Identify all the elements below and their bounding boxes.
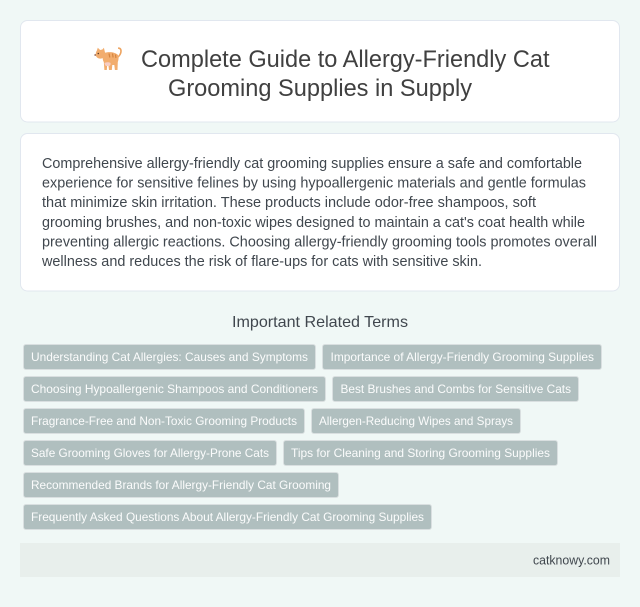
text block: description: wellness and reduces the risk of flare-ups for cats with sensitive skin. bbox=[41, 254, 482, 270]
text block: description: Comprehensive allergy-friendly cat grooming supplies ensure a safe and comfortable bbox=[42, 156, 582, 172]
chip: shampoos bbox=[24, 376, 326, 402]
text block: description: that minimize skin irritation. These products include odor-free shampoos, soft bbox=[42, 195, 536, 211]
text block: description bbox=[41, 156, 597, 270]
chip: importance bbox=[322, 344, 602, 370]
chip: wipes bbox=[312, 408, 520, 434]
chip: shampoos: Choosing Hypoallergenic Shampoos and Conditioners bbox=[31, 382, 318, 396]
title bbox=[141, 46, 550, 102]
chip: fragrance-free: Fragrance-Free and Non-Toxic Grooming Products bbox=[31, 414, 297, 428]
text block: description: preventing allergic reactions. Choosing allergy-friendly grooming tools promotes overall bbox=[42, 234, 597, 250]
text block: description: experience for sensitive felines by using hypoallergenic materials and gentle formulas bbox=[42, 176, 586, 192]
text block: description: grooming brushes, and non-toxic wipes designed to maintain a cat's coat health while bbox=[42, 215, 585, 231]
chip: brushes bbox=[332, 376, 578, 402]
chip: faq bbox=[24, 504, 432, 530]
chip: wipes: Allergen-Reducing Wipes and Sprays bbox=[319, 414, 513, 428]
chip: fragrance-free bbox=[24, 408, 304, 434]
chip: brushes: Best Brushes and Combs for Sensitive Cats bbox=[340, 382, 571, 396]
chip: cleaning tips bbox=[284, 440, 558, 466]
chip: understanding cat allergies: Understanding Cat Allergies: Causes and Symptoms bbox=[31, 350, 308, 364]
heading: related terms: Important Related Terms bbox=[232, 314, 408, 331]
chip: brands: Recommended Brands for Allergy-Friendly Cat Grooming bbox=[31, 478, 331, 492]
footer: catknowy.com bbox=[533, 552, 610, 568]
icon: cat bbox=[94, 47, 122, 70]
chip: understanding cat allergies bbox=[24, 344, 316, 370]
footer bbox=[20, 543, 620, 577]
title: Grooming Supplies in Supply bbox=[168, 75, 472, 102]
chip: importance: Importance of Allergy-Friendly Grooming Supplies bbox=[330, 350, 594, 364]
title: Complete Guide to Allergy-Friendly Cat bbox=[141, 46, 550, 73]
chip: brands bbox=[24, 472, 338, 498]
chip: faq: Frequently Asked Questions About Allergy-Friendly Cat Grooming Supplies bbox=[31, 510, 424, 524]
chip: cleaning tips: Tips for Cleaning and Storing Grooming Supplies bbox=[291, 446, 550, 460]
chips: related terms bbox=[24, 344, 602, 530]
chip: gloves bbox=[24, 440, 276, 466]
panel: description bbox=[20, 134, 620, 291]
chip: gloves: Safe Grooming Gloves for Allergy-Prone Cats bbox=[31, 446, 269, 460]
panel: title card bbox=[20, 20, 620, 122]
